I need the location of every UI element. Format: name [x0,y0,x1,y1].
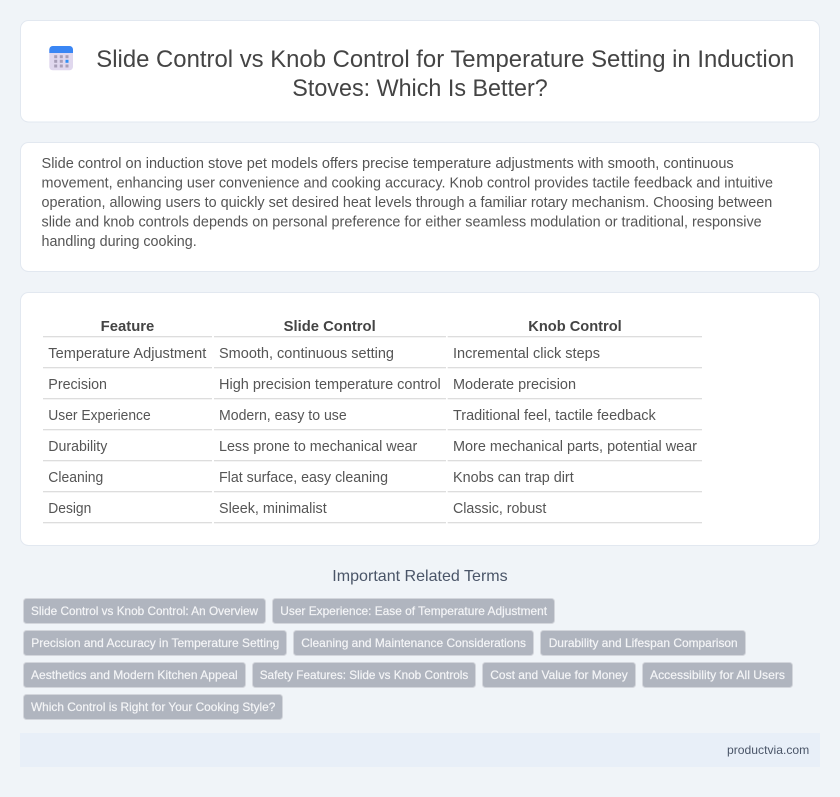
text block: introduction paragraph: slide and knob controls depends on personal preference for either seamless modulation or traditional, responsive [42,214,762,230]
tag [540,630,746,656]
text block: introduction paragraph: movement, enhancing user convenience and cooking accuracy. Knob control provides tactile feedback and intuitive [42,176,773,192]
table row: cleaning: Cleaning [48,470,103,486]
tag [642,662,792,688]
footer source text: productvia.com [727,743,809,757]
tag [24,598,266,624]
panel: comparison table [20,292,820,546]
title [96,46,794,102]
icon: calendar [49,46,73,70]
tag [252,662,476,688]
table header: Slide Control [284,319,376,335]
title: Stoves: Which Is Better? [292,75,548,102]
table row: cleaning: Flat surface, easy cleaning [219,470,388,486]
table row: temperature adjustment: Smooth, continuous setting [219,346,394,362]
table row: precision [48,377,576,393]
table row: user experience: Modern, easy to use [219,408,347,424]
table row: temperature adjustment [48,346,600,362]
tag [24,694,282,720]
table row: design: Design [48,501,91,517]
table row: durability: Less prone to mechanical wear [219,439,417,455]
tag [272,598,554,624]
table row: cleaning [48,470,574,486]
tag: Slide Control vs Knob Control: An Overview [31,604,258,618]
tag: Aesthetics and Modern Kitchen Appeal [31,668,238,682]
table row: durability [48,439,697,455]
table row: precision: Precision [48,377,107,393]
tag [294,630,534,656]
tag: Accessibility for All Users [650,668,785,682]
table row: user experience: Traditional feel, tactile feedback [453,408,656,424]
tag: Safety Features: Slide vs Knob Controls [260,668,468,682]
table row: durability: More mechanical parts, potential wear [453,439,697,455]
table row: precision: High precision temperature control [219,377,441,393]
tag: Which Control is Right for Your Cooking Style? [31,700,276,714]
panel: title card [20,20,820,122]
table row: precision: Moderate precision [453,377,576,393]
tag [24,662,246,688]
table row: temperature adjustment: Temperature Adjustment [48,346,206,362]
text block: introduction paragraph: Slide control on induction stove pet models offers precise temperature adjustments with smooth, continuous [42,156,734,172]
tag: User Experience: Ease of Temperature Adjustment [280,604,548,618]
footer [20,733,820,767]
tag: Cost and Value for Money [490,668,628,682]
table row: design: Sleek, minimalist [219,501,327,517]
title: Slide Control vs Knob Control for Temperature Setting in Induction [96,46,794,73]
tag: Precision and Accuracy in Temperature Setting [31,636,279,650]
table row: durability: Durability [48,439,108,455]
text block: introduction paragraph: handling during cooking. [42,234,197,250]
table header: Knob Control [528,319,622,335]
table row: cleaning: Knobs can trap dirt [453,470,574,486]
panel: introduction [20,142,820,272]
tag: Durability and Lifespan Comparison [549,636,738,650]
text block: introduction paragraph [42,156,773,250]
tag [24,630,286,656]
tag [482,662,636,688]
panel: related term tags [24,598,792,720]
table row: user experience [48,408,656,424]
table row: design [48,501,546,517]
table header: Feature [101,319,154,335]
heading: important related terms: Important Related Terms [332,568,508,585]
tag: Cleaning and Maintenance Considerations [301,636,526,650]
table row: user experience: User Experience [48,408,151,424]
text block: introduction paragraph: operation, allowing users to quickly set desired heat levels through a familiar rotary mechanism. Choosing between [42,195,772,211]
table row: design: Classic, robust [453,501,546,517]
table header [101,319,622,335]
table row: temperature adjustment: Incremental click steps [453,346,600,362]
